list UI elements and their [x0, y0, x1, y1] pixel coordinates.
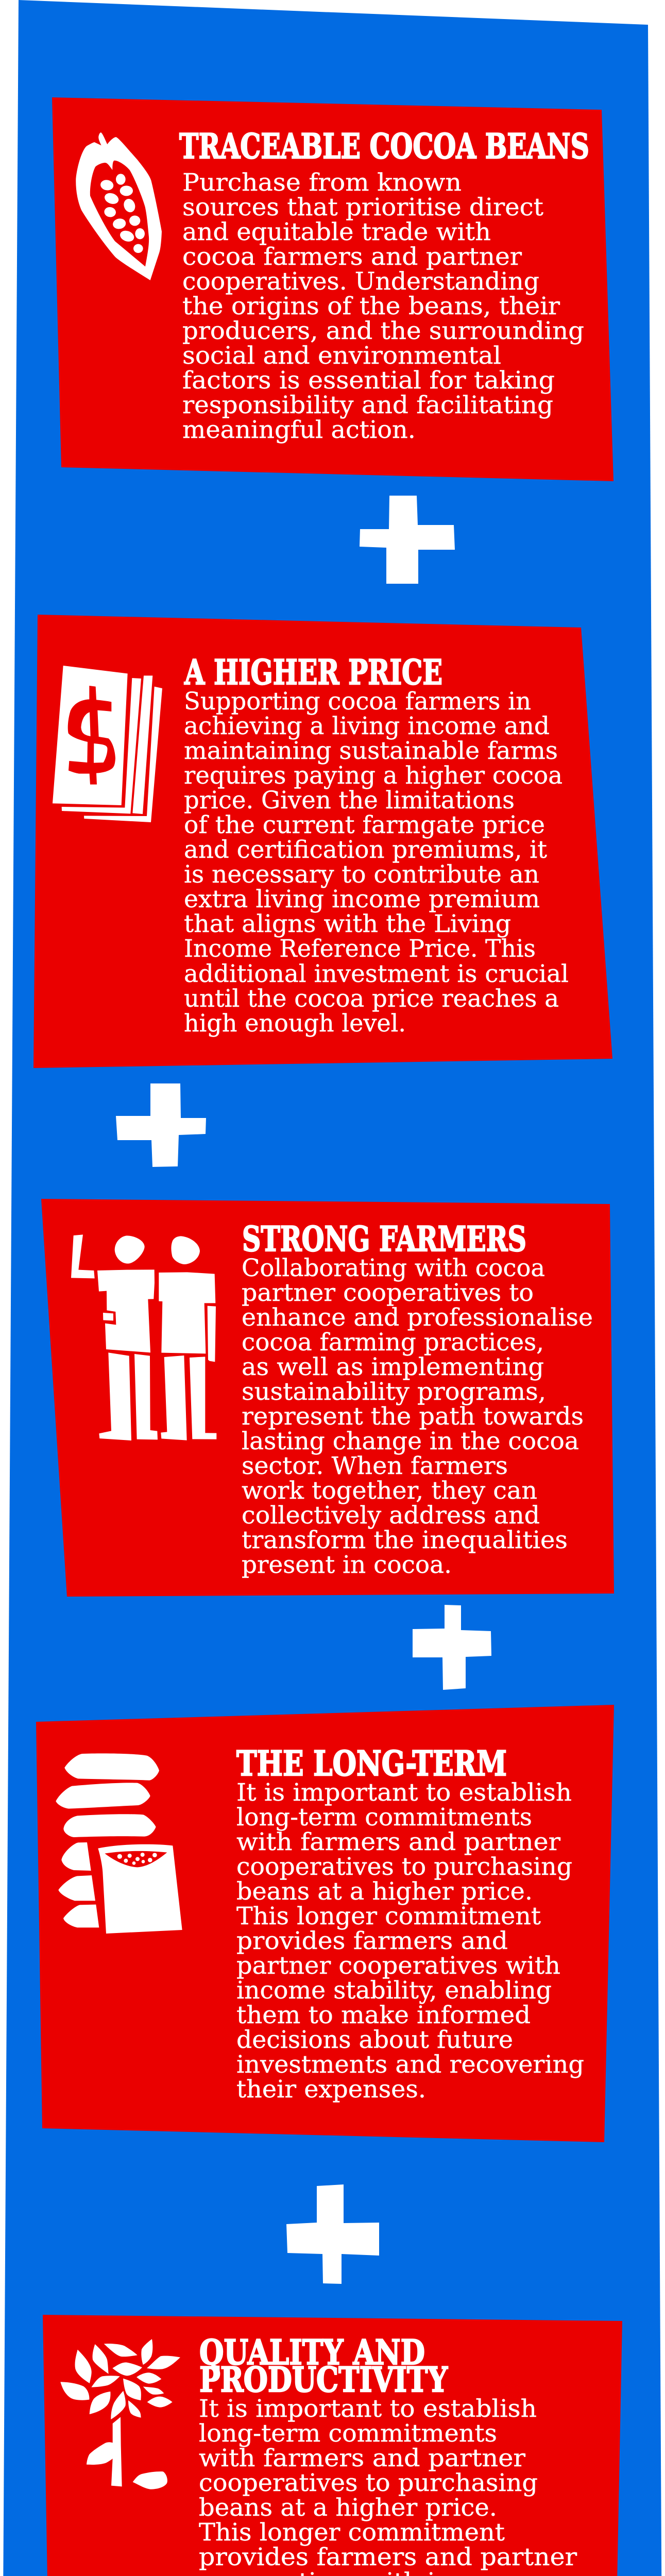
body text: long-term commitments	[236, 1803, 532, 1832]
body text: cocoa farmers and partner	[182, 243, 522, 271]
body text: producers, and the surrounding	[182, 317, 584, 345]
body text: This longer commitment	[199, 2518, 505, 2547]
body text: cocoa farming practices,	[242, 1328, 544, 1357]
panel: traceable cocoa beans	[52, 97, 613, 481]
body text: work together, they can	[242, 1477, 537, 1505]
body text: lasting change in the cocoa	[242, 1427, 579, 1455]
body text: and certification premiums, it	[184, 836, 547, 864]
body text: enhance and professionalise	[242, 1303, 593, 1332]
body text: represent the path towards	[242, 1402, 584, 1431]
body text	[199, 2395, 603, 2576]
heading: STRONG FARMERS	[242, 1219, 526, 1259]
body text: cooperatives to purchasing	[236, 1853, 572, 1881]
panel: quality and productivity	[43, 2315, 622, 2576]
body text: them to make informed	[236, 2001, 531, 2029]
body text: sector. When farmers	[242, 1452, 508, 1480]
body text: present in cocoa.	[242, 1551, 452, 1579]
heading: THE LONG-TERM	[236, 1743, 507, 1784]
body text: This longer commitment	[236, 1902, 541, 1930]
body text: Supporting cocoa farmers in	[184, 687, 531, 716]
body text: with farmers and partner	[236, 1828, 561, 1856]
body text	[182, 168, 584, 444]
body text: cooperatives to purchasing	[199, 2469, 538, 2497]
body text: sources that prioritise direct	[182, 193, 543, 222]
body text: collectively address and	[242, 1501, 540, 1530]
plus sign 4	[286, 2184, 379, 2284]
body text: income stability, enabling	[236, 1976, 552, 2005]
body text: beans at a higher price.	[236, 1877, 533, 1906]
body text: Collaborating with cocoa	[242, 1254, 545, 1282]
body text: provides farmers and	[236, 1927, 508, 1955]
body text: that aligns with the Living	[184, 910, 511, 938]
body text: social and environmental	[182, 342, 501, 370]
body text: requires paying a higher cocoa	[184, 761, 562, 790]
body text	[236, 1778, 584, 2104]
heading: PRODUCTIVITY	[199, 2360, 448, 2400]
body text: decisions about future	[236, 2026, 513, 2054]
icon: cocoa pod	[76, 132, 162, 280]
body text: It is important to establish	[236, 1778, 572, 1807]
body text: sustainability programs,	[242, 1378, 546, 1406]
body text: provides farmers and partner	[199, 2543, 577, 2571]
body text	[242, 1254, 593, 1579]
panel: strong farmers	[41, 1199, 614, 1597]
heading	[199, 2332, 448, 2400]
body text: beans at a higher price.	[199, 2494, 497, 2522]
body text: achieving a living income and	[184, 712, 550, 740]
body text: partner cooperatives to	[242, 1279, 534, 1307]
body text: Purchase from known	[182, 168, 462, 197]
body text: price. Given the limitations	[184, 786, 515, 815]
icon: tree	[60, 2339, 180, 2489]
body text: It is important to establish	[199, 2395, 537, 2423]
body text: their expenses.	[236, 2075, 426, 2104]
body text: responsibility and facilitating	[182, 391, 553, 419]
panel: the long-term	[36, 1705, 614, 2142]
body text: partner cooperatives with	[236, 1952, 560, 1980]
body text: is necessary to contribute an	[184, 860, 539, 889]
heading: QUALITY AND	[199, 2332, 425, 2372]
body text: and equitable trade with	[182, 218, 491, 246]
body text: until the cocoa price reaches a	[184, 985, 559, 1013]
plus sign 3	[413, 1605, 491, 1690]
heading: A HIGHER PRICE	[184, 652, 442, 692]
body text: extra living income premium	[184, 885, 540, 913]
body text: the origins of the beans, their	[182, 292, 560, 320]
icon: stack of banknotes	[53, 666, 162, 822]
icon: two farmers	[71, 1234, 216, 1440]
body text: long-term commitments	[199, 2419, 497, 2448]
body text: Income Reference Price. This	[184, 935, 536, 963]
body text: as well as implementing	[242, 1353, 544, 1381]
body text: meaningful action.	[182, 416, 416, 444]
body text: with farmers and partner	[199, 2444, 526, 2472]
body text: cooperatives. Understanding	[182, 267, 539, 296]
body text: factors is essential for taking	[182, 366, 555, 395]
body text: transform the inequalities	[242, 1526, 568, 1554]
plus sign 1	[360, 496, 455, 584]
plus sign 2	[116, 1083, 206, 1167]
body text: investments and recovering	[236, 2050, 584, 2079]
body text: high enough level.	[184, 1009, 406, 1038]
body text: maintaining sustainable farms	[184, 737, 558, 765]
panel: a higher price	[33, 615, 612, 1068]
body text	[184, 687, 569, 1038]
icon: cocoa sacks	[56, 1753, 182, 1934]
body text: of the current farmgate price	[184, 811, 545, 839]
body text: additional investment is crucial	[184, 960, 569, 988]
